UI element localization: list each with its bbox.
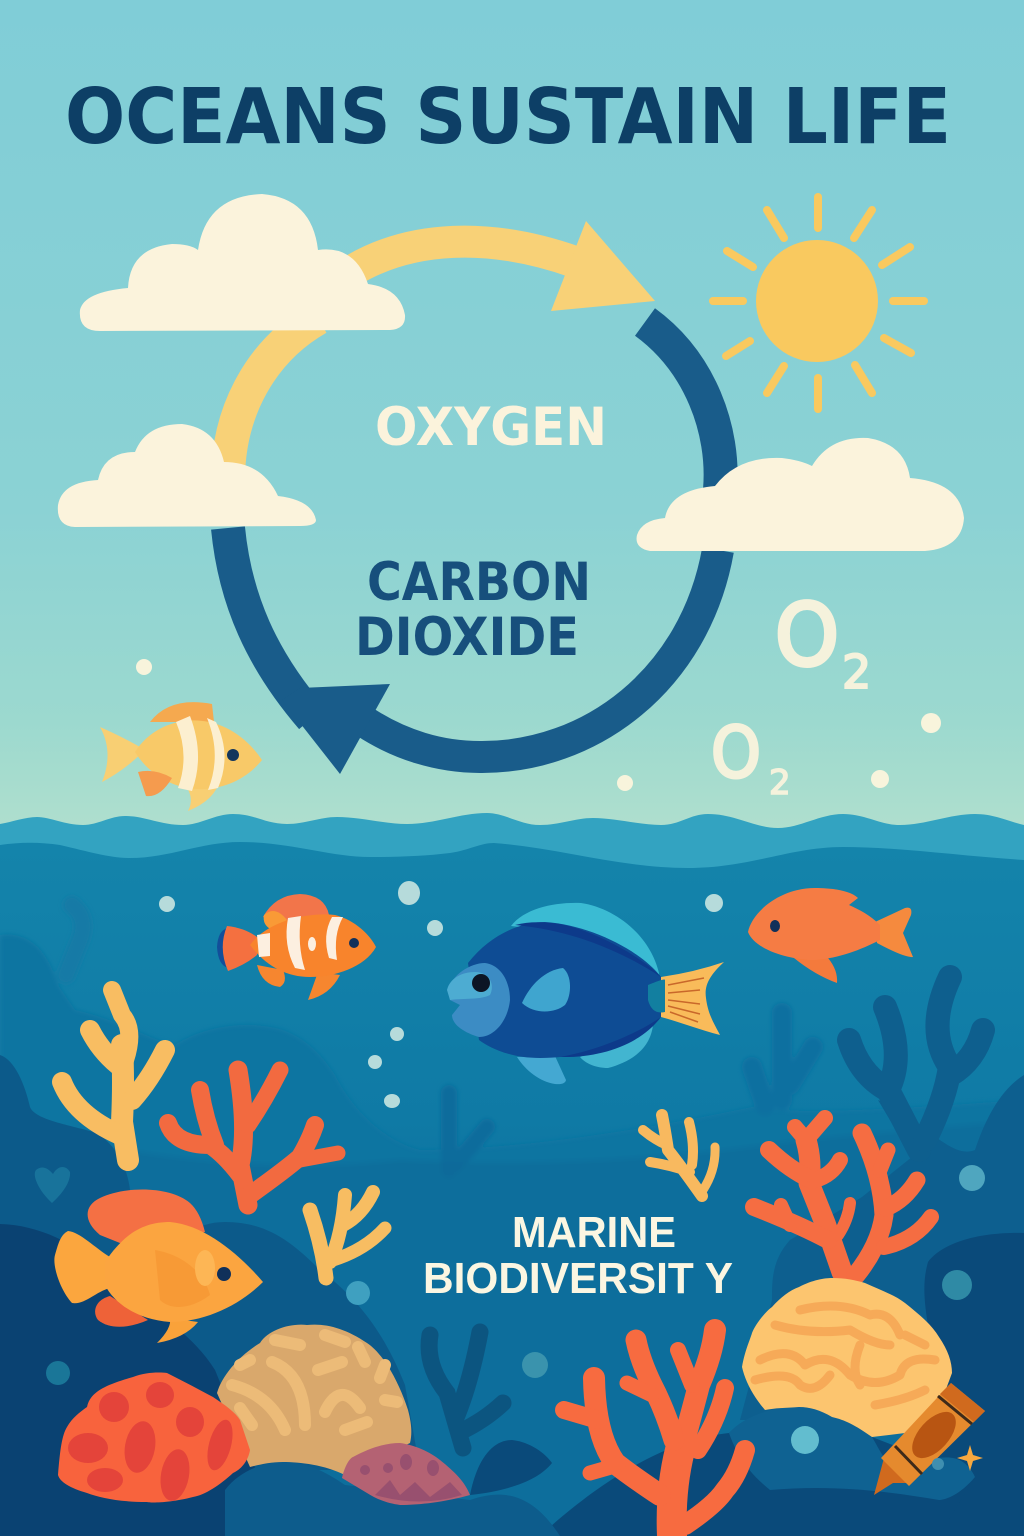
sky background (0, 0, 1024, 850)
label: O2 large: O (775, 586, 839, 686)
label: O2 small: 2 (769, 763, 791, 803)
label: carbon dioxide: CARBON (367, 552, 591, 613)
cloud: top left (80, 194, 405, 331)
icon: heart silhouette (35, 1167, 70, 1203)
arrow: yellow cycle arrow (228, 221, 655, 480)
seabed left mid dome (130, 1222, 420, 1470)
icon: sun (713, 197, 924, 409)
label: marine biodiversity: MARINE (512, 1208, 676, 1257)
seabed mound: dark center (470, 1440, 552, 1495)
label: carbon dioxide (355, 552, 591, 668)
cloud: right (637, 438, 964, 551)
label: O2 small (711, 712, 791, 803)
fish: blue tang (447, 903, 724, 1084)
icon: crayon (874, 1383, 985, 1495)
brain coral: tan center (217, 1325, 411, 1475)
right dark mound (740, 1075, 1024, 1420)
label: marine biodiversity (423, 1208, 733, 1303)
label: marine biodiversity: BIODIVERSIT Y (423, 1254, 733, 1303)
seabed left dark (0, 1224, 345, 1536)
air bubbles (136, 659, 941, 791)
label: oxygen: OXYGEN (375, 397, 607, 458)
title: OCEANS SUSTAIN LIFE (65, 73, 951, 162)
coral: red bottom (564, 1330, 745, 1536)
sea body (0, 842, 1024, 1536)
seabed right base (540, 1407, 975, 1536)
brain coral: purple (342, 1443, 470, 1505)
seabed right darkest (900, 1233, 1024, 1536)
coral silhouette: center (429, 1332, 503, 1448)
label: carbon dioxide: DIOXIDE (355, 607, 579, 668)
coral: red left (168, 1070, 338, 1205)
bubble on mound (791, 1426, 819, 1454)
teal bubbles lower (46, 1165, 985, 1385)
coral silhouette: right (849, 977, 983, 1150)
cloud: mid left (58, 424, 316, 527)
fish: clownfish (217, 894, 376, 1000)
label: O2 large: 2 (842, 645, 871, 699)
fish: yellow above water (100, 702, 262, 811)
background reef silhouettes (0, 905, 1024, 1536)
bubbles underwater (159, 881, 723, 1108)
coral: red right (754, 1118, 931, 1275)
brain coral: yellow right (742, 1278, 952, 1437)
seabed mound: center bottom (225, 1462, 560, 1536)
label: O2 small: O (711, 712, 761, 794)
water surface (0, 813, 1024, 900)
coral: small yellow right (643, 1115, 715, 1196)
label: O2 large (775, 586, 871, 699)
brain coral: red (58, 1372, 250, 1503)
seabed mound: right bottom (729, 1407, 975, 1500)
fish: big orange (54, 1190, 263, 1343)
left dark mound (0, 1055, 130, 1260)
coral: yellow left (62, 990, 165, 1160)
fish: orange right (748, 888, 913, 983)
coral: small yellow (310, 1192, 385, 1278)
arrow: blue cycle arrow (228, 322, 721, 774)
